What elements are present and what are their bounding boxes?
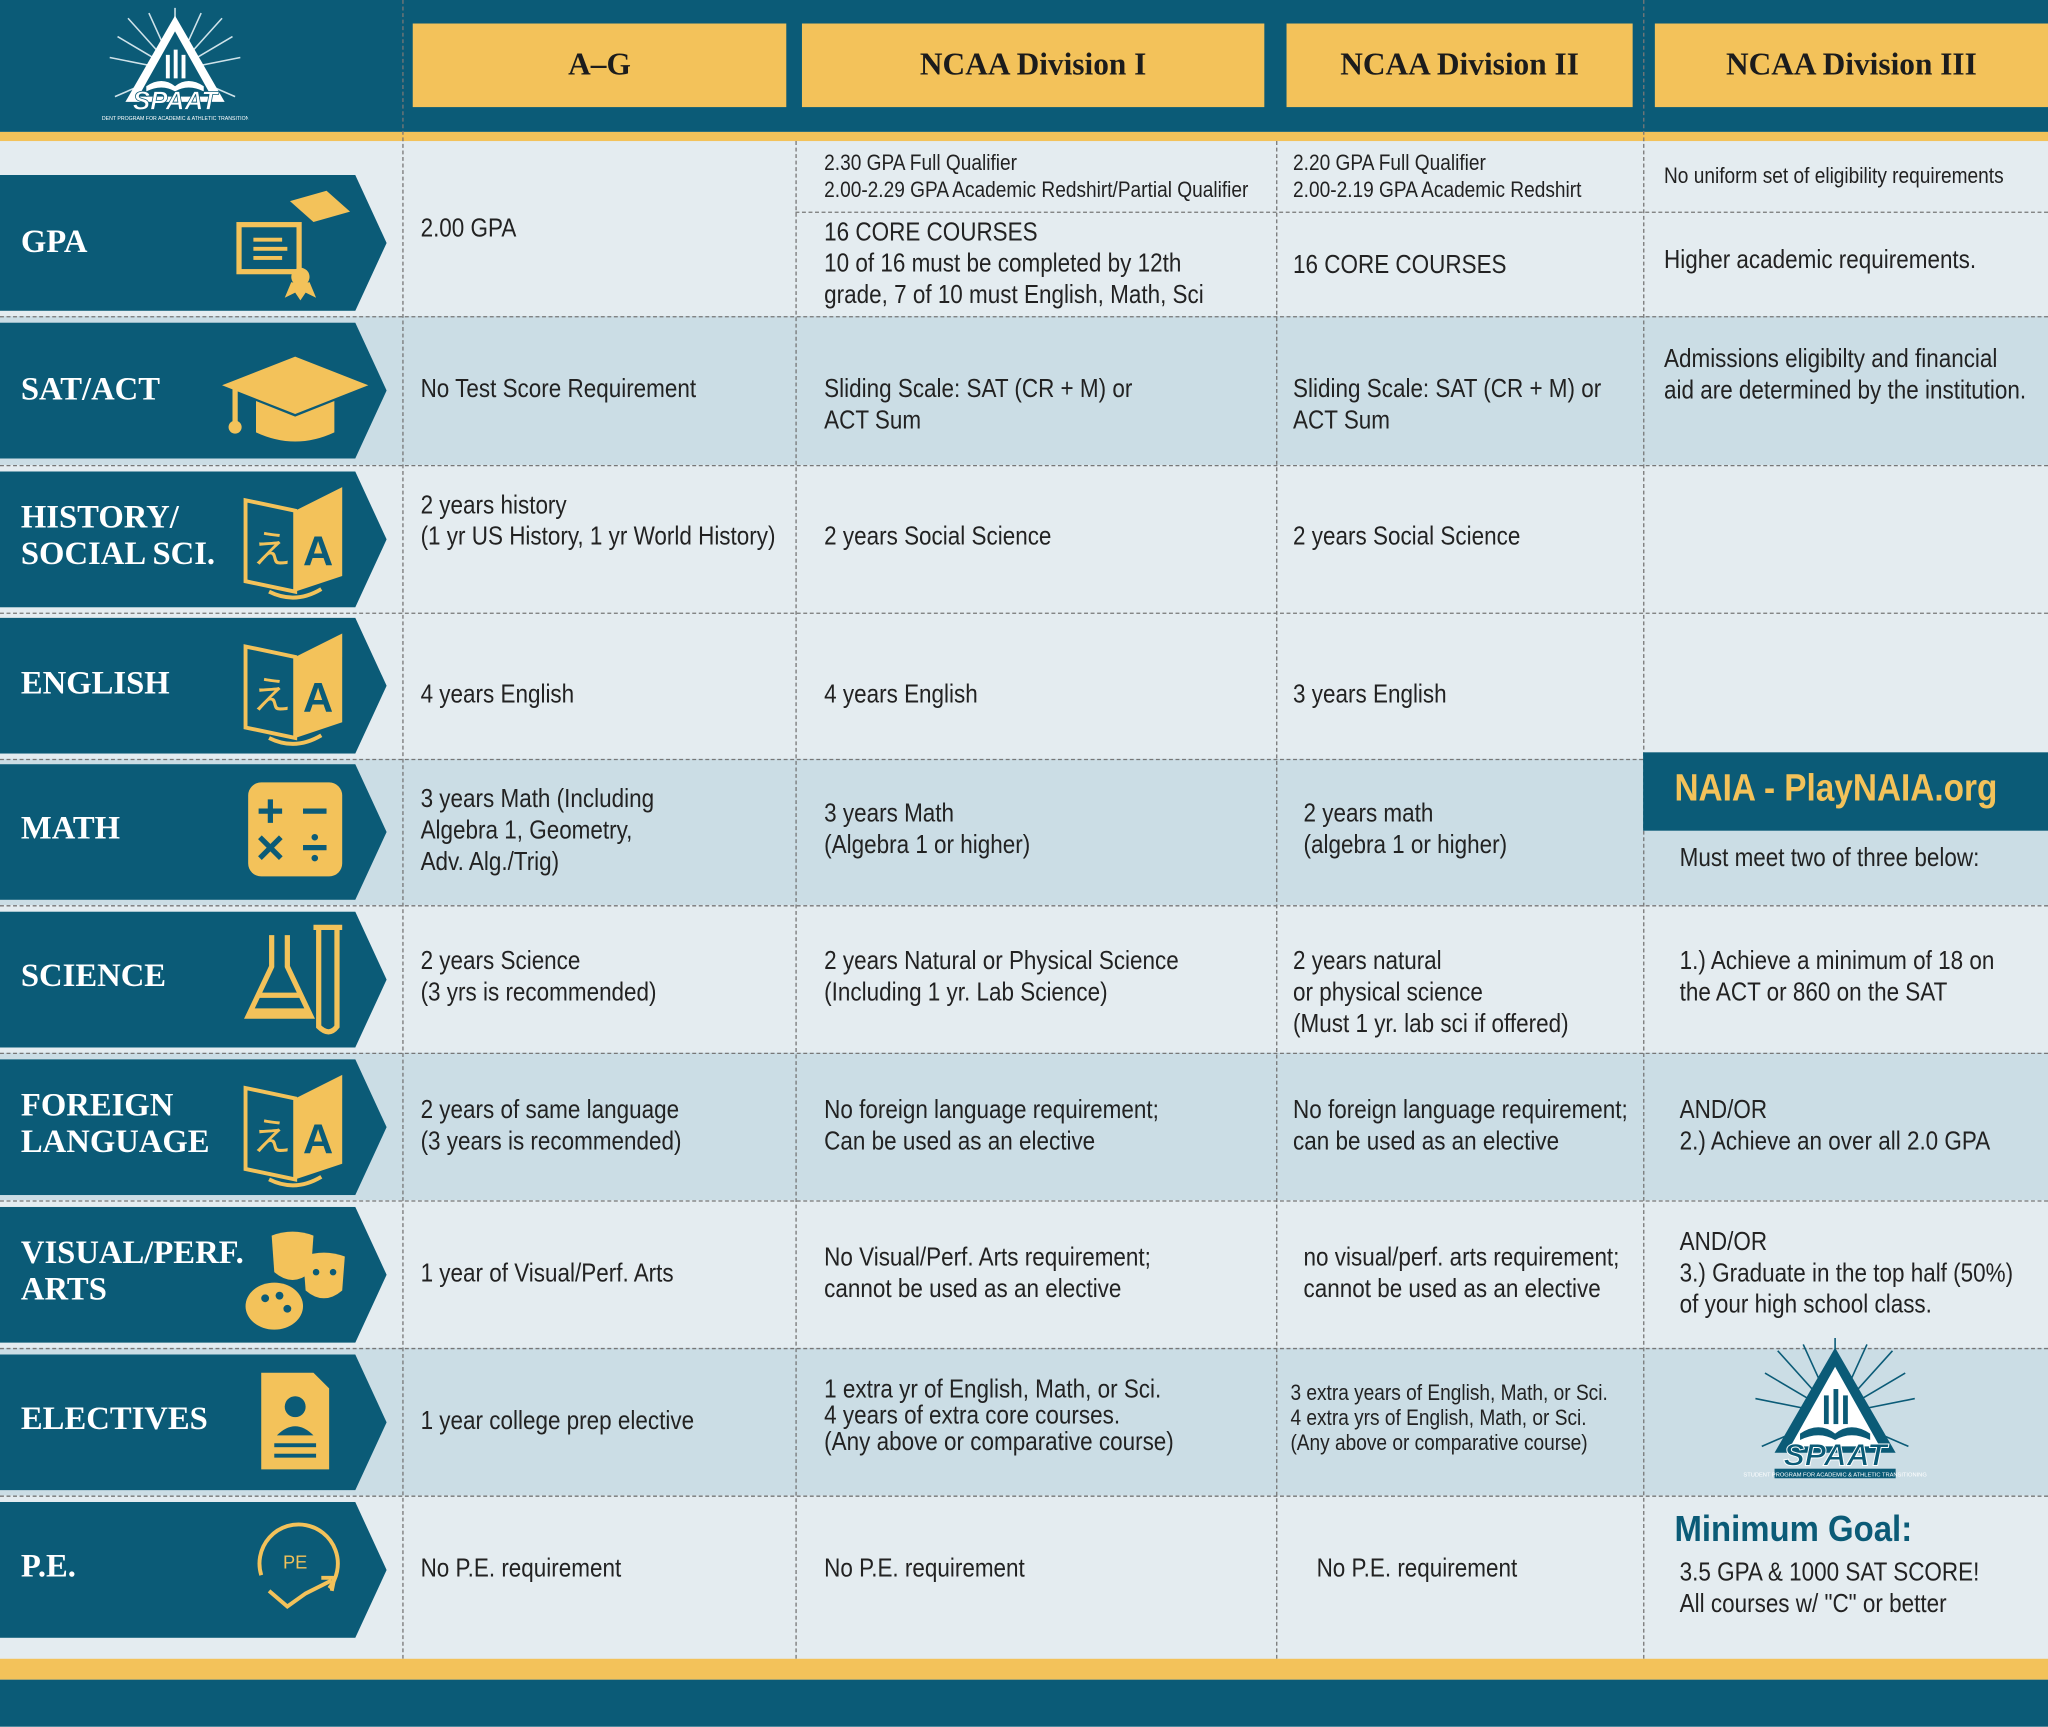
label: MATH: MATH xyxy=(21,811,120,846)
column: NCAA Division III text: aid are determined by the institution. xyxy=(1664,376,2026,405)
header: A-G xyxy=(413,24,786,107)
column: A-G text xyxy=(420,214,775,1583)
column: NCAA Division II text: (algebra 1 or higher) xyxy=(1304,831,1507,859)
logo xyxy=(102,8,248,122)
logo: SPAAT xyxy=(133,86,219,116)
column: NCAA Division II text xyxy=(1290,150,1628,1583)
label: SCIENCE: SCIENCE xyxy=(21,959,166,994)
NAIA box: NAIA - PlayNAIA.org xyxy=(1674,768,1997,810)
NAIA requirements: Must meet two of three below: xyxy=(1680,844,1979,872)
header: NCAA Division II xyxy=(1287,24,1633,107)
label: GPA: GPA xyxy=(21,225,87,260)
column: NCAA Division I text: (Any above or comparative course) xyxy=(824,1428,1174,1456)
label: P.E. xyxy=(0,1502,386,1638)
label: HISTORY/SOCIAL SCI. xyxy=(0,472,386,608)
column: NCAA Division I text: 2 years Social Science xyxy=(824,522,1051,551)
column: NCAA Division I text: (Algebra 1 or higher) xyxy=(824,831,1030,859)
header: NCAA Division II: NCAA Division II xyxy=(1340,48,1579,82)
label: ELECTIVES xyxy=(0,1354,386,1490)
column: NCAA Division II text: 2 years Social Science xyxy=(1293,522,1520,551)
column: A-G text: Adv. Alg./Trig) xyxy=(421,848,559,876)
column: A-G text: 1 year of Visual/Perf. Arts xyxy=(421,1259,674,1288)
NAIA box xyxy=(1643,752,2048,831)
column: A-G text: 2 years Science xyxy=(421,947,580,976)
column: NCAA Division I text: 4 years of extra core courses. xyxy=(824,1401,1120,1430)
label: SAT/ACT xyxy=(0,322,386,458)
column: NCAA Division I text: 2.30 GPA Full Qualifier xyxy=(824,150,1017,175)
NAIA requirements: AND/OR xyxy=(1680,1096,1767,1125)
column: NCAA Division II text: 2.00-2.19 GPA Academic Redshirt xyxy=(1293,178,1581,202)
logo: SPAAT bottom: SPAAT xyxy=(1783,1437,1889,1473)
column: A-G text: 3 years Math (Including xyxy=(421,785,654,814)
column: NCAA Division II text: no visual/perf. arts requirement; xyxy=(1304,1243,1619,1272)
header: NCAA Division I xyxy=(802,24,1264,107)
label: SAT/ACT: SAT/ACT xyxy=(21,372,160,408)
column: NCAA Division III text xyxy=(1664,163,2026,405)
label: HISTORY/SOCIAL SCI.: HISTORY/ xyxy=(21,500,179,536)
column: NCAA Division I text: cannot be used as an elective xyxy=(824,1275,1121,1304)
label: ENGLISH: え xyxy=(252,665,291,721)
label: FOREIGN LANGUAGE: え xyxy=(252,1107,291,1163)
column: NCAA Division II text: (Must 1 yr. lab sci if offered) xyxy=(1293,1010,1569,1038)
NAIA requirements: 3.) Graduate in the top half (50%) xyxy=(1680,1259,2013,1288)
column: NCAA Division II text: 2.20 GPA Full Qualifier xyxy=(1293,150,1486,175)
NAIA requirements: 2.) Achieve an over all 2.0 GPA xyxy=(1680,1127,1990,1156)
column: NCAA Division II text: 16 CORE COURSES xyxy=(1293,251,1507,280)
label: FOREIGN LANGUAGE xyxy=(0,1059,387,1196)
column: NCAA Division I text xyxy=(824,150,1248,1583)
column: NCAA Division I text: 16 CORE COURSES xyxy=(824,218,1038,247)
label: VISUAL/PERF. ARTS: VISUAL/PERF. xyxy=(21,1236,244,1271)
column: NCAA Division III text: Admissions eligibilty and financial xyxy=(1664,345,1997,374)
column: A-G text: Algebra 1, Geometry, xyxy=(421,816,632,845)
header: A-G: A–G xyxy=(568,48,631,82)
column: NCAA Division II text: 4 extra yrs of English, Math, or Sci. xyxy=(1290,1405,1587,1430)
column: NCAA Division I text: 4 years English xyxy=(824,680,978,709)
column: NCAA Division I text: No Visual/Perf. Arts requirement; xyxy=(824,1243,1151,1272)
logo: SPAAT bottom: STUDENT PROGRAM FOR ACADEMIC & ATHLETIC TRANSITIONING xyxy=(1743,1473,1927,1479)
column: NCAA Division II text: or physical science xyxy=(1293,978,1483,1007)
label: ELECTIVES: ELECTIVES xyxy=(21,1401,208,1437)
column: A-G text: 2.00 GPA xyxy=(421,214,516,243)
column: A-G text: (3 yrs is recommended) xyxy=(421,978,657,1007)
column: NCAA Division II text: 2 years natural xyxy=(1293,947,1442,976)
label: HISTORY/SOCIAL SCI.: え xyxy=(252,519,291,575)
minimum goal: 3.5 GPA & 1000 SAT SCORE! xyxy=(1680,1558,1979,1587)
column: NCAA Division II text: (Any above or comparative course) xyxy=(1290,1430,1588,1455)
label: SCIENCE xyxy=(0,912,387,1048)
column: A-G text: 4 years English xyxy=(421,680,574,709)
column: NCAA Division II text: No P.E. requirement xyxy=(1317,1554,1517,1583)
column: NCAA Division I text: ACT Sum xyxy=(824,406,921,435)
header band xyxy=(0,0,2048,142)
column: NCAA Division III text: Higher academic requirements. xyxy=(1664,246,1976,274)
minimum goal xyxy=(1674,1509,1979,1618)
NAIA requirements: 1.) Achieve a minimum of 18 on xyxy=(1680,947,1994,976)
column: NCAA Division I text: 1 extra yr of English, Math, or Sci. xyxy=(824,1375,1161,1404)
column: A-G text: 2 years of same language xyxy=(421,1096,679,1125)
column: NCAA Division II text: 2 years math xyxy=(1304,799,1433,828)
column: NCAA Division II text: Sliding Scale: SAT (CR + M) or xyxy=(1293,375,1601,404)
header: NCAA Division III xyxy=(1655,24,2048,107)
column: A-G text: No Test Score Requirement xyxy=(421,375,696,404)
column: NCAA Division II text: 3 years English xyxy=(1293,680,1447,709)
minimum goal: All courses w/ "C" or better xyxy=(1680,1590,1947,1618)
label: FOREIGN LANGUAGE: A xyxy=(303,1115,333,1162)
column: NCAA Division I text: No foreign language requirement; xyxy=(824,1096,1159,1125)
column: A-G text: 2 years history xyxy=(421,491,567,520)
label: FOREIGN LANGUAGE: LANGUAGE xyxy=(21,1125,210,1160)
column: NCAA Division I text: 10 of 16 must be completed by 12th xyxy=(824,249,1181,278)
label: ENGLISH xyxy=(0,618,387,754)
label: P.E.: PE xyxy=(283,1552,307,1573)
column: NCAA Division I text: Can be used as an elective xyxy=(824,1127,1095,1156)
label: MATH xyxy=(0,764,386,900)
NAIA requirements xyxy=(1680,844,2013,1319)
logo: SPAAT bottom xyxy=(1743,1338,1927,1479)
label: P.E.: P.E. xyxy=(21,1549,76,1584)
NAIA requirements: the ACT or 860 on the SAT xyxy=(1680,978,1947,1007)
label: ENGLISH: A xyxy=(303,674,333,721)
column: NCAA Division I text: 3 years Math xyxy=(824,799,954,828)
NAIA requirements: of your high school class. xyxy=(1680,1290,1932,1319)
column: A-G text: 1 year college prep elective xyxy=(421,1407,694,1435)
label: FOREIGN LANGUAGE: FOREIGN xyxy=(21,1088,173,1123)
column: A-G text: No P.E. requirement xyxy=(421,1554,621,1583)
label: HISTORY/SOCIAL SCI.: SOCIAL SCI. xyxy=(21,537,215,572)
label: HISTORY/SOCIAL SCI.: A xyxy=(303,528,333,575)
header: NCAA Division III: NCAA Division III xyxy=(1726,48,1977,82)
column: NCAA Division III text: No uniform set of eligibility requirements xyxy=(1664,163,2004,188)
header: NCAA Division I: NCAA Division I xyxy=(920,48,1146,82)
column: NCAA Division II text: cannot be used as an elective xyxy=(1304,1275,1601,1304)
column: NCAA Division II text: No foreign language requirement; xyxy=(1293,1096,1628,1125)
label: VISUAL/PERF. ARTS: ARTS xyxy=(21,1272,107,1307)
column: NCAA Division I text: grade, 7 of 10 must English, Math, Sci xyxy=(824,281,1204,310)
label: GPA xyxy=(0,175,386,311)
column: NCAA Division I text: (Including 1 yr. Lab Science) xyxy=(824,978,1108,1007)
label: ENGLISH: ENGLISH xyxy=(21,666,170,701)
column: NCAA Division I text: Sliding Scale: SAT (CR + M) or xyxy=(824,375,1132,404)
column: NCAA Division I text: No P.E. requirement xyxy=(824,1554,1025,1583)
column: NCAA Division II text: can be used as an elective xyxy=(1293,1127,1559,1156)
NAIA requirements: AND/OR xyxy=(1680,1228,1767,1256)
minimum goal: Minimum Goal: xyxy=(1674,1509,1912,1549)
column: NCAA Division I text: 2.00-2.29 GPA Academic Redshirt/Partial Qualifier xyxy=(824,178,1248,202)
column: NCAA Division II text: 3 extra years of English, Math, or Sci. xyxy=(1290,1381,1608,1405)
column: A-G text: (3 years is recommended) xyxy=(421,1127,682,1156)
column: A-G text: (1 yr US History, 1 yr World History) xyxy=(421,522,775,551)
column: NCAA Division I text: 2 years Natural or Physical Science xyxy=(824,947,1179,976)
footer band xyxy=(0,1658,2048,1727)
label: VISUAL/PERF. ARTS xyxy=(0,1206,387,1343)
column: NCAA Division II text: ACT Sum xyxy=(1293,406,1390,435)
